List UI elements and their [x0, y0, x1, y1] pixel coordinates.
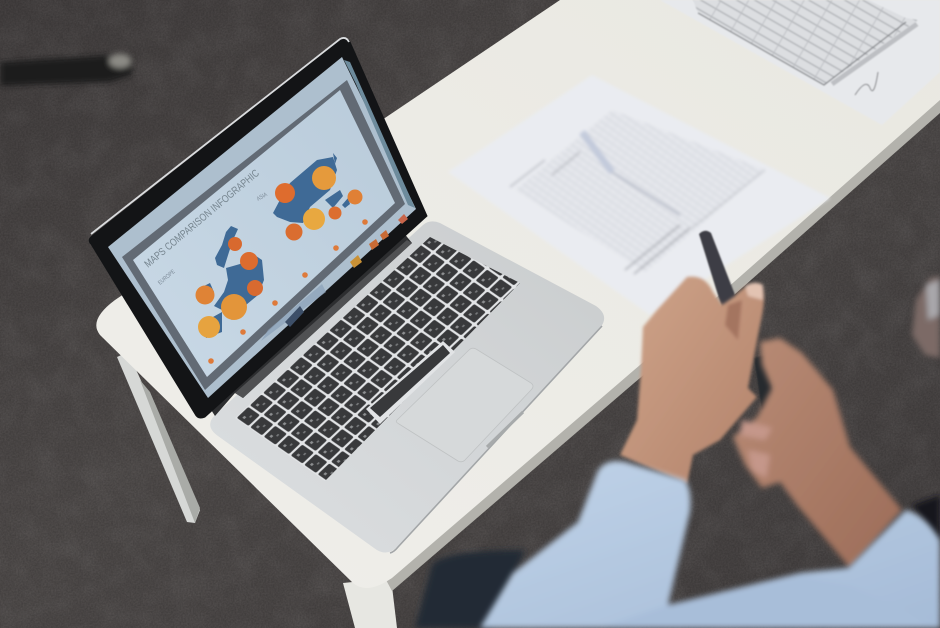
shirt	[480, 461, 940, 628]
display glass	[108, 57, 416, 398]
screen bottom reflection	[261, 214, 408, 341]
display reflection frame	[122, 80, 405, 390]
laptop lid	[89, 38, 427, 418]
left hand holding pen	[620, 277, 764, 484]
label: Europe: EUROPE	[157, 269, 177, 287]
trackpad	[396, 348, 533, 462]
dark trousers	[415, 550, 525, 628]
table legs	[117, 352, 397, 628]
paper: front sheet with table	[448, 75, 830, 315]
latch notch	[487, 412, 523, 447]
laptop base	[208, 221, 604, 553]
map: Asia	[273, 153, 350, 223]
map: Europe	[204, 226, 264, 338]
label: Asia: ASIA	[256, 192, 269, 203]
legend dots	[208, 219, 368, 364]
space bar	[366, 341, 455, 424]
slide title: MAPS COMPARISON INFOGRAPHIC	[142, 167, 262, 270]
hinge strip	[208, 232, 412, 416]
blurred object right edge	[912, 276, 940, 545]
paper: back sheet with form	[660, 0, 940, 125]
blurred black stand top left	[0, 54, 132, 86]
bubbles: Asia	[275, 166, 362, 240]
bubbles: Europe	[196, 237, 263, 338]
pen	[699, 231, 776, 410]
keyboard	[235, 237, 520, 481]
right hand	[733, 338, 902, 568]
slide	[133, 90, 395, 377]
